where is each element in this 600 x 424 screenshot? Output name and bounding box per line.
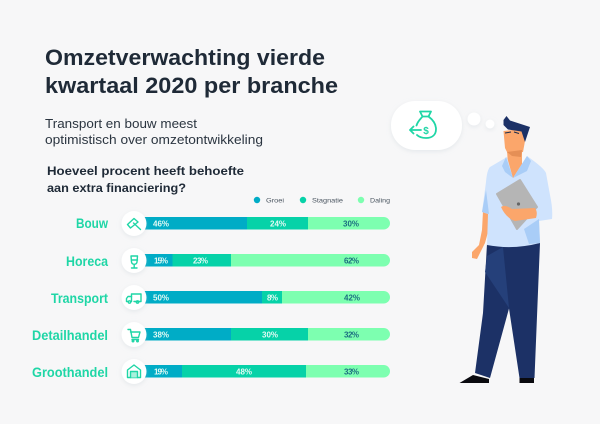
row: Transport: 8% <box>267 294 278 302</box>
row: Bouw <box>76 217 390 238</box>
head and hair <box>504 116 530 157</box>
legend: Stagnatie <box>312 198 343 204</box>
subtitle <box>45 117 263 147</box>
forearm and hand <box>501 206 537 221</box>
shirt <box>482 156 552 247</box>
legend: Groei <box>266 198 284 204</box>
neck <box>507 150 522 178</box>
row: Groothandel: 19% <box>154 368 168 376</box>
row: Groothandel: 33% <box>344 368 359 376</box>
row: Detailhandel: 38% <box>153 330 169 340</box>
person illustration <box>460 116 552 383</box>
row: Horeca: 62% <box>344 256 359 266</box>
title: Omzetverwachting vierde <box>45 45 325 70</box>
row: Transport: 42% <box>344 294 360 302</box>
subtitle: optimistisch over omzetontwikkeling <box>45 133 263 147</box>
row: Bouw: 46% <box>153 220 169 228</box>
row: Transport: Transport <box>51 291 108 306</box>
icon: money bag: $ <box>423 126 429 137</box>
row: Bouw: 30% <box>343 220 359 228</box>
tablet <box>497 180 537 229</box>
row: Detailhandel <box>32 328 390 348</box>
trousers and shoes <box>460 243 540 383</box>
row: Groothandel: Groothandel <box>32 365 108 380</box>
chart question heading: Hoeveel procent heeft behoefte <box>47 164 244 178</box>
title: kwartaal 2020 per branche <box>45 73 338 98</box>
left arm <box>472 211 489 259</box>
legend: Daling <box>370 198 390 204</box>
row: Detailhandel: Detailhandel <box>32 328 108 343</box>
row: Transport <box>51 291 390 312</box>
title <box>45 45 338 98</box>
row: Horeca: Horeca <box>66 254 108 269</box>
subtitle: Transport en bouw meest <box>45 117 198 131</box>
row: Detailhandel: 30% <box>262 330 278 340</box>
chart question heading: aan extra financiering? <box>47 181 186 195</box>
row: Horeca: 15% <box>154 256 168 266</box>
row: Groothandel: 48% <box>236 368 252 376</box>
row: Horeca <box>66 254 390 274</box>
row: Bouw: 24% <box>270 220 286 228</box>
row: Horeca: 23% <box>193 256 208 266</box>
row: Bouw: Bouw <box>76 216 108 231</box>
thought bubble with money bag icon <box>391 101 494 150</box>
row: Detailhandel: 32% <box>344 330 359 340</box>
legend <box>254 197 390 204</box>
chart question heading <box>47 164 244 195</box>
row: Groothandel <box>32 364 390 386</box>
row: Transport: 50% <box>153 294 169 302</box>
